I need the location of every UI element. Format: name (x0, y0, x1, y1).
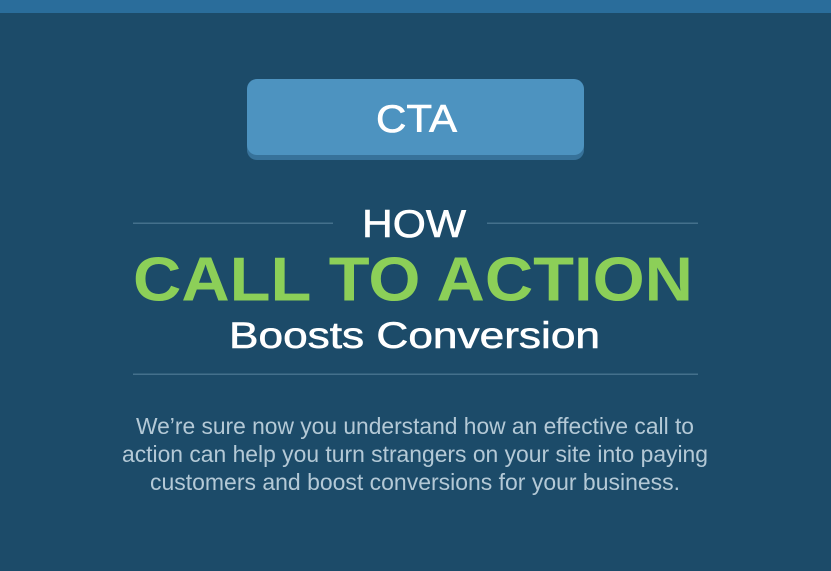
description text: action can help you turn strangers on your site into paying (122, 441, 708, 467)
top accent bar (0, 0, 831, 13)
description text (122, 413, 708, 495)
description text: customers and boost conversions for your business. (150, 469, 680, 495)
title: HOW (362, 203, 466, 246)
CTA button: CTA (376, 98, 457, 141)
title (133, 203, 693, 356)
title: Boosts Conversion (229, 315, 600, 356)
heading rules (133, 222, 698, 375)
CTA button (247, 79, 584, 160)
title: CALL TO ACTION (133, 246, 693, 314)
description text: We’re sure now you understand how an effective call to (136, 413, 694, 439)
